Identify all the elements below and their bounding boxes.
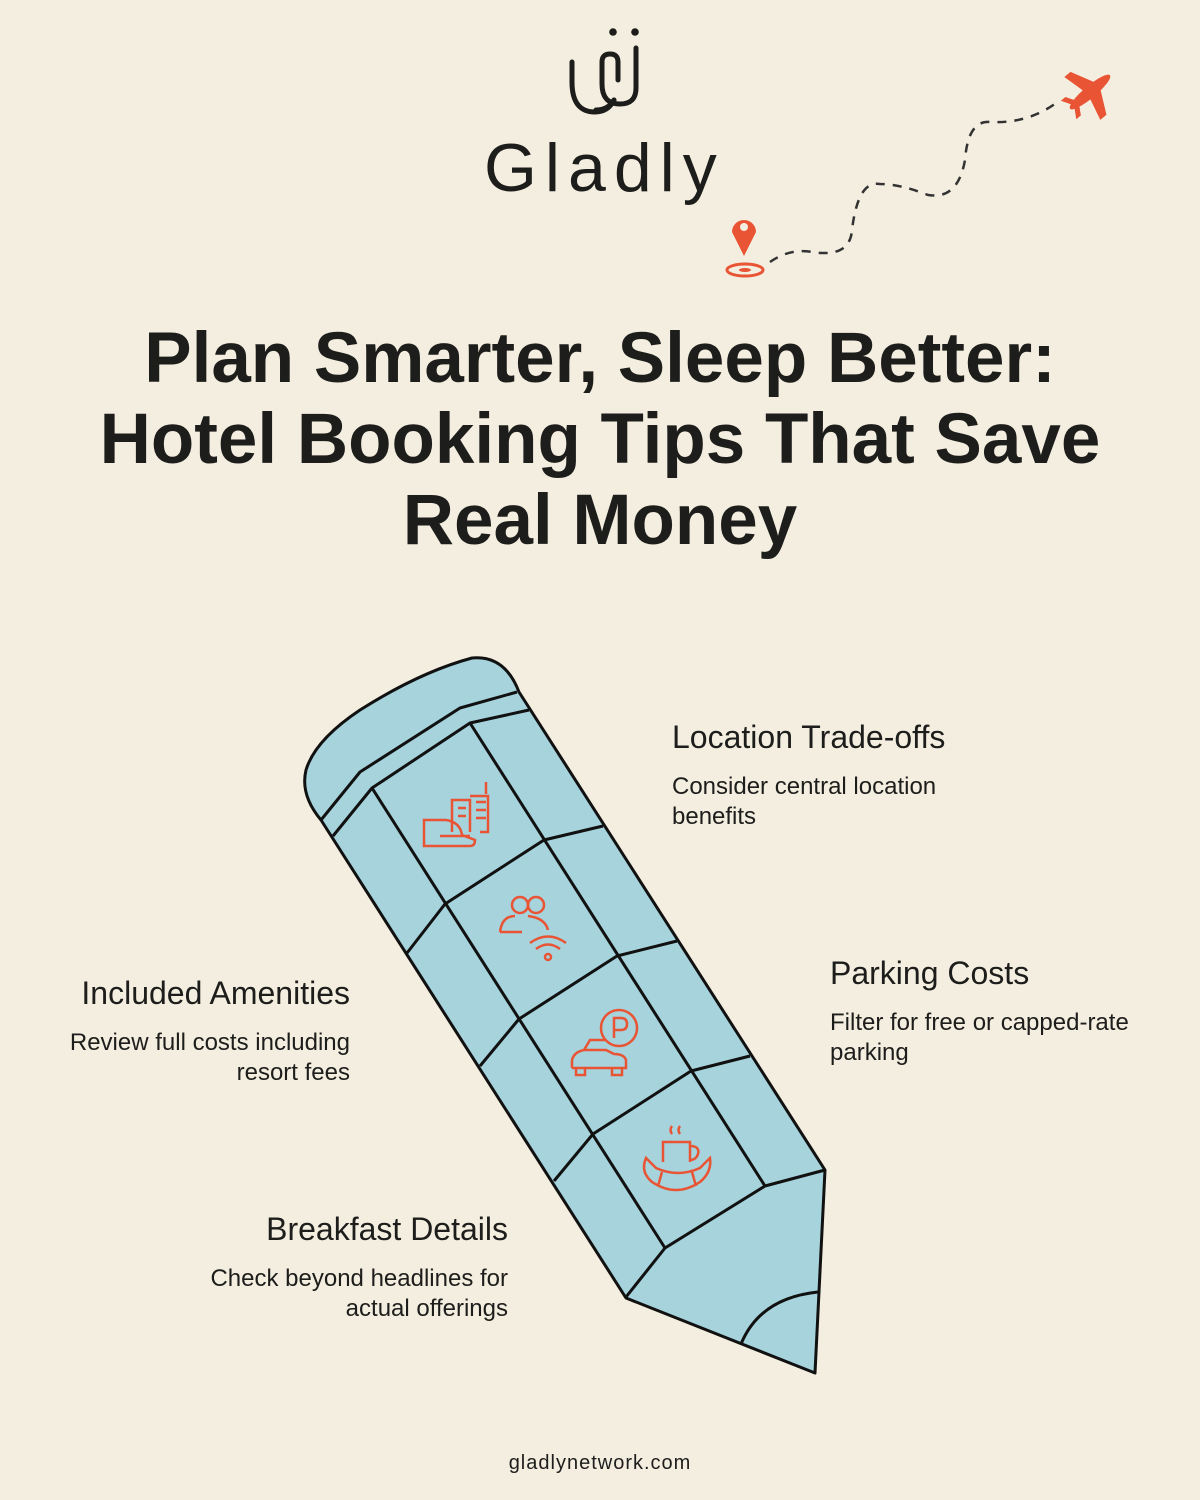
- label: Breakfast Details: Breakfast Details: [266, 1211, 508, 1247]
- logo: [570, 28, 639, 114]
- footer url: gladlynetwork.com: [509, 1452, 691, 1474]
- label: Location Trade-offs: [672, 719, 945, 830]
- pencil diagram: [303, 656, 826, 1374]
- icon: car parking: [572, 1010, 637, 1075]
- title: [100, 319, 1100, 560]
- title: Real Money: [403, 481, 797, 560]
- icon: buildings: [424, 782, 488, 846]
- title: Hotel Booking Tips That Save: [100, 400, 1100, 479]
- label: Parking Costs: Parking Costs: [830, 955, 1029, 991]
- label: Breakfast Details: [210, 1211, 508, 1322]
- label: Location Trade-offs: Consider central location benefits: [672, 773, 936, 830]
- icon: people wifi: [500, 897, 566, 960]
- label: Included Amenities: [70, 975, 350, 1086]
- icon: croissant coffee: [644, 1126, 710, 1190]
- label: Location Trade-offs: Location Trade-offs: [672, 719, 945, 755]
- icon: logo mark: [572, 48, 636, 112]
- label: Included Amenities: Included Amenities: [81, 975, 350, 1011]
- title: Plan Smarter, Sleep Better:: [144, 319, 1056, 398]
- label: Parking Costs: [830, 955, 1129, 1066]
- label: Parking Costs: Filter for free or capped-rate parking: [830, 1009, 1129, 1066]
- label: Included Amenities: Review full costs including resort fees: [70, 1029, 350, 1086]
- wordmark: Gladly: [484, 130, 725, 206]
- label: Breakfast Details: Check beyond headlines for actual offerings: [210, 1265, 508, 1322]
- icon: travel route with pin and plane: [726, 72, 1110, 278]
